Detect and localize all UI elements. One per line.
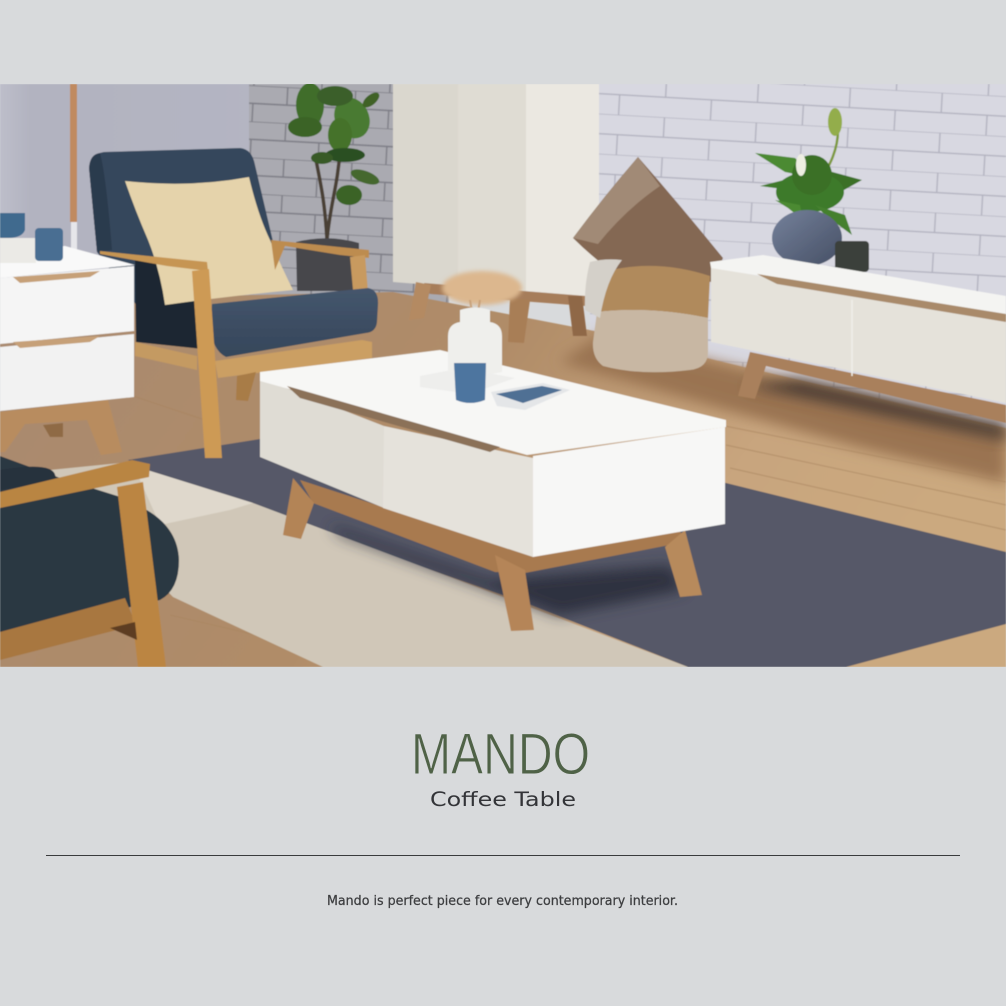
rug shadow under table	[330, 525, 685, 615]
tall fiddle leaf plant	[288, 83, 382, 240]
seat cushion	[210, 288, 378, 357]
plant pot	[296, 238, 359, 291]
near armrest and post	[100, 251, 208, 271]
photo: living room scene	[0, 83, 1006, 667]
dark rug	[128, 439, 1006, 667]
floor shadow under console	[560, 335, 1006, 484]
floor plank streaks	[726, 426, 1006, 530]
light brick wall	[590, 84, 1006, 432]
far armrest	[271, 240, 369, 270]
wooden floor	[0, 292, 1006, 667]
vase with dried grass	[442, 271, 522, 375]
white console	[710, 255, 1006, 423]
table legs and rails	[300, 480, 685, 573]
cream rug	[50, 462, 688, 667]
cup	[35, 228, 63, 261]
armchair back	[89, 148, 378, 458]
lower rail	[135, 342, 197, 370]
white coffee table	[260, 271, 726, 631]
dark brick wall	[248, 84, 450, 303]
lighter cream rug corner	[140, 470, 252, 524]
book	[0, 238, 36, 263]
wardrobe	[393, 84, 599, 343]
dark shadow beneath console	[745, 380, 1006, 440]
right end panel	[533, 427, 725, 557]
dark jar	[835, 241, 869, 272]
tray	[420, 368, 515, 394]
description: Mando is perfect piece for every contemporary interior.	[327, 894, 678, 909]
wooden groove	[287, 386, 500, 452]
blue cup	[454, 363, 486, 403]
plant on console	[755, 108, 862, 235]
beige cushion	[125, 177, 293, 305]
cabinet base	[0, 400, 122, 455]
round blue pot	[772, 210, 842, 266]
bowl	[0, 213, 25, 238]
left drawer	[260, 378, 384, 508]
centre drawer	[383, 426, 533, 557]
title: MANDO	[411, 722, 590, 787]
square plate	[491, 383, 570, 410]
lamp stand	[70, 84, 77, 250]
left white cabinet	[0, 213, 135, 455]
divider line	[46, 855, 960, 856]
woven basket	[585, 259, 710, 372]
front armchair	[0, 456, 179, 667]
subtitle: Coffee Table	[430, 788, 576, 811]
brown pillow	[573, 157, 723, 282]
left painted wall	[0, 84, 250, 296]
table top	[260, 350, 726, 455]
